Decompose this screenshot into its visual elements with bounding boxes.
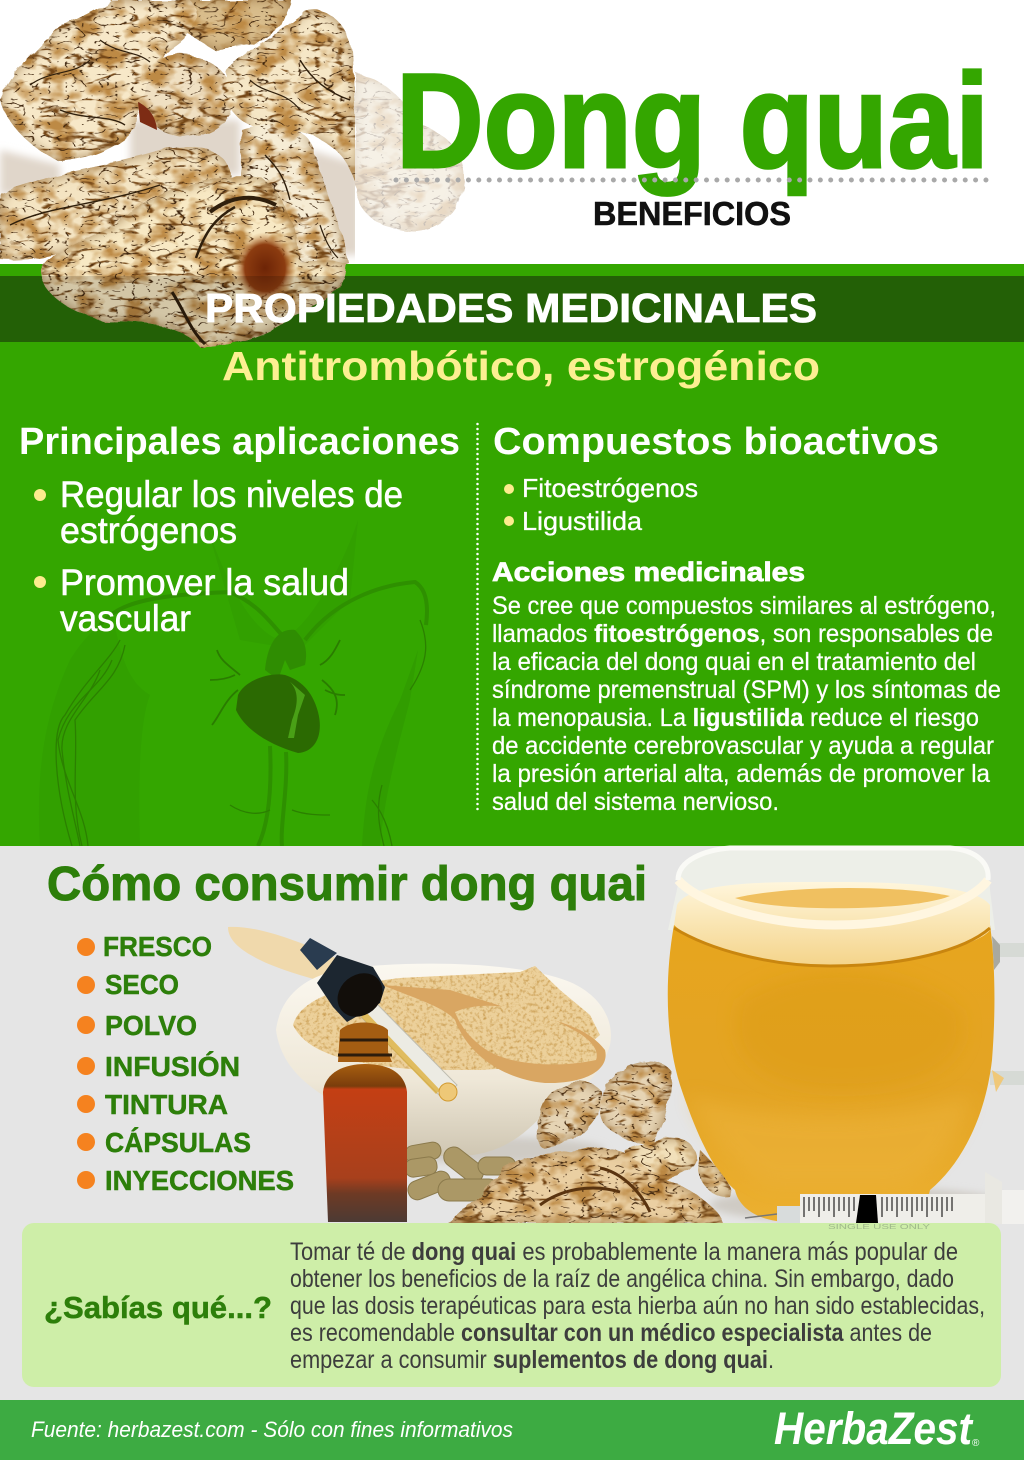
paragraph: acciones medicinales: síndrome premenstrual (SPM) y los síntomas de <box>492 676 1001 704</box>
arteries <box>100 582 427 846</box>
header background <box>0 0 1024 264</box>
item one <box>60 474 403 551</box>
logo: HerbaZest: ® <box>972 1438 980 1449</box>
great vessels <box>265 630 306 680</box>
dark band: propiedades medicinales <box>0 276 1024 342</box>
bottle neck <box>338 1022 392 1062</box>
properties subheading: Antitrombótico, estrogénico <box>222 343 820 389</box>
dark gaps <box>540 1168 650 1212</box>
bullet <box>504 516 514 526</box>
tea surface inside cup <box>735 888 950 908</box>
powder <box>293 966 600 1070</box>
image: capsules <box>404 1141 516 1203</box>
item: Ligustilida <box>522 506 643 536</box>
dropper tube <box>361 1003 457 1099</box>
item two: Promover la salud <box>60 562 349 603</box>
bullet and tintura: TINTURA <box>105 1089 228 1120</box>
list: forms of consumption <box>77 931 294 1196</box>
heading: como consumir: Cómo consumir dong quai <box>47 858 647 911</box>
bullet and seco: SECO <box>105 969 179 1000</box>
callout text: empezar a consumir suplementos de dong quai. <box>290 1346 774 1374</box>
image: dried root slices <box>448 1062 731 1224</box>
green medicinal panel background <box>0 264 1024 846</box>
paragraph: acciones medicinales: la menopausia. La ligustilida reduce el riesgo <box>492 704 979 732</box>
paragraph: acciones medicinales: de accidente cerebrovascular y ayuda a regular <box>492 732 994 760</box>
bullet and polvo: POLVO <box>105 1010 197 1041</box>
callout heading: ¿Sabías qué...? <box>44 1290 272 1325</box>
image: dried dong quai roots <box>0 0 360 347</box>
bullet and fresco: FRESCO <box>103 931 212 962</box>
item two: vascular <box>60 598 191 639</box>
paragraph: acciones medicinales: llamados fitoestrógenos, son responsables de <box>492 620 993 648</box>
subtitle: BENEFICIOS <box>593 195 791 232</box>
paragraph: acciones medicinales: salud del sistema nervioso. <box>492 788 779 816</box>
glass rim <box>678 880 988 925</box>
list: compuestos <box>504 473 698 536</box>
root group back <box>0 0 360 269</box>
footer <box>0 1400 1024 1460</box>
paragraph: acciones medicinales: Se cree que compuestos similares al estrógeno, <box>492 592 996 620</box>
bullet and seco <box>77 969 179 1000</box>
bullet <box>34 489 46 501</box>
spoon bowl <box>382 985 606 1083</box>
glass upper <box>668 848 995 930</box>
liquid shading <box>736 971 963 1090</box>
syringe label: SINGLE USE ONLY <box>828 1224 931 1231</box>
coronary branches <box>210 640 345 725</box>
paragraph: acciones medicinales: la eficacia del dong quai en el tratamiento del <box>492 648 976 676</box>
image: syringe <box>745 1172 1024 1224</box>
callout text: es recomendable consultar con un médico especialista antes de <box>290 1319 932 1347</box>
paragraph: acciones medicinales: la presión arterial alta, además de promover la <box>492 760 990 788</box>
dark cavity between roots <box>138 102 157 130</box>
callout text <box>290 1238 985 1374</box>
heading: principales aplicaciones: Principales aplicaciones <box>19 421 460 463</box>
item one: Regular los niveles de <box>60 474 403 515</box>
heading: compuestos bioactivos: Compuestos bioactivos <box>493 421 939 463</box>
dropper cap <box>300 938 337 970</box>
band heading: PROPIEDADES MEDICINALES <box>205 285 817 331</box>
source note: Fuente: herbazest.com - Sólo con fines informativos <box>31 1417 513 1442</box>
syringe scale <box>804 1197 952 1217</box>
dotted divider under title <box>396 178 988 182</box>
logo: HerbaZest: HerbaZest <box>774 1403 974 1454</box>
foam <box>674 882 990 966</box>
bullet and capsulas: CÁPSULAS <box>105 1127 251 1158</box>
footer background <box>0 1400 1024 1460</box>
band shade over root <box>0 276 1024 342</box>
bowl body <box>276 964 611 1156</box>
root cracks <box>10 40 350 344</box>
root front: rust end <box>234 232 296 304</box>
arm veins <box>56 620 426 846</box>
bullet and inyecciones: INYECCIONES <box>105 1165 294 1196</box>
callout text: Tomar té de dong quai es probablemente la manera más popular de <box>290 1238 958 1266</box>
list: aplicaciones <box>34 474 403 639</box>
bottle body <box>323 1064 407 1222</box>
item: Fitoestrógenos <box>522 473 698 503</box>
image: bowl of powder with spoon <box>228 927 611 1163</box>
illustration: human circulatory system and heart <box>39 520 427 846</box>
image: tincture dropper bottle <box>300 938 457 1222</box>
bullet <box>34 576 46 588</box>
bowl shadow <box>375 1137 605 1163</box>
spoon powder <box>455 1006 597 1064</box>
item two <box>60 562 349 639</box>
handle <box>990 950 1024 1078</box>
root front <box>40 176 346 347</box>
body silhouette <box>39 612 150 846</box>
dotted column divider <box>476 424 479 813</box>
root shadow on white <box>0 120 360 255</box>
callout: sabias que <box>22 1223 1001 1387</box>
spoon handle <box>228 927 395 1000</box>
bullet and infusion: INFUSIÓN <box>105 1051 240 1082</box>
cup shadow <box>710 1187 1010 1223</box>
liquid surface line <box>674 928 990 966</box>
image: cup of dong quai tea <box>668 848 1024 1223</box>
paragraph: acciones medicinales <box>492 592 1001 816</box>
callout background <box>22 1223 1001 1387</box>
image: faded dong quai root behind title <box>355 72 465 231</box>
consumption panel background <box>0 846 1024 1400</box>
liquid body <box>668 925 994 1222</box>
bullet <box>504 484 514 494</box>
item one: estrógenos <box>60 510 237 551</box>
heart <box>236 674 320 753</box>
heading: acciones medicinales: Acciones medicinales <box>492 557 805 587</box>
